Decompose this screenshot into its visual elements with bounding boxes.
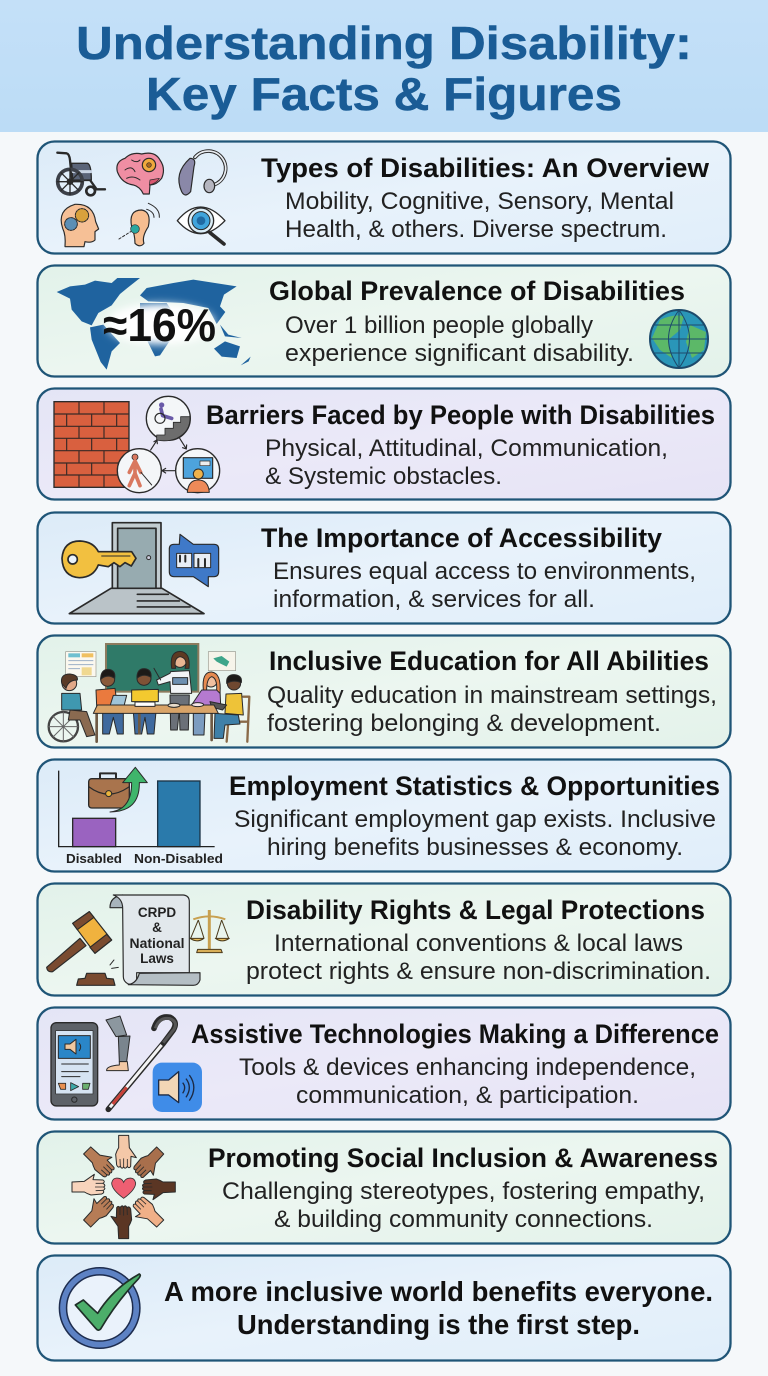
heading: Assistive Technologies Making a Difference xyxy=(191,1019,719,1049)
body text: information, & services for all. xyxy=(273,586,595,613)
scroll text: National xyxy=(130,936,184,951)
panel: global prevalence xyxy=(38,266,730,376)
bar label: non-disabled: Non-Disabled xyxy=(134,851,223,866)
heading: Inclusive Education for All Abilities xyxy=(269,646,709,676)
body text: experience significant disability. xyxy=(285,340,634,367)
icon: growth arrow xyxy=(110,767,147,812)
icon: wheelchair xyxy=(57,153,105,195)
body text: & building community connections. xyxy=(274,1206,653,1233)
icon: person with cane xyxy=(117,449,161,493)
icon: speaker app xyxy=(153,1063,202,1112)
poster right xyxy=(208,652,236,671)
heading: Global Prevalence of Disabilities xyxy=(269,276,685,306)
closing statement: A more inclusive world benefits everyone. xyxy=(164,1276,713,1307)
body text xyxy=(246,930,711,985)
body text: Mobility, Cognitive, Sensory, Mental xyxy=(285,188,674,215)
body text xyxy=(222,1178,705,1233)
scroll text xyxy=(130,905,184,966)
icon: gavel xyxy=(47,912,118,985)
panel: closing message xyxy=(38,1256,730,1360)
heading: Types of Disabilities: An Overview xyxy=(261,153,710,183)
body text: & Systemic obstacles. xyxy=(265,463,502,490)
icon: door and ramp xyxy=(69,523,204,614)
teacher xyxy=(154,651,192,730)
body text: Physical, Attitudinal, Communication, xyxy=(265,435,668,462)
icon: briefcase xyxy=(89,773,129,808)
body text: communication, & participation. xyxy=(296,1082,639,1109)
body text xyxy=(273,558,696,613)
icons: brick wall and barrier cycle xyxy=(54,396,220,493)
body text: Ensures equal access to environments, xyxy=(273,558,696,585)
bar: non-disabled xyxy=(158,781,200,847)
icon: eye with magnifier xyxy=(177,207,225,244)
student in yellow xyxy=(132,669,158,734)
student in purple xyxy=(192,672,221,735)
scroll text: Laws xyxy=(140,951,174,966)
body text: Significant employment gap exists. Inclusive xyxy=(234,806,716,833)
table xyxy=(93,702,218,742)
body text: Over 1 billion people globally xyxy=(285,312,593,339)
panel: inclusive education xyxy=(38,636,730,748)
bar label: disabled: Disabled xyxy=(66,851,122,866)
arrows between circles xyxy=(151,438,187,473)
body text xyxy=(285,188,674,243)
icon: key xyxy=(62,541,136,578)
body text xyxy=(285,312,634,367)
chalkboard xyxy=(106,644,198,692)
map continents xyxy=(57,278,251,370)
icon: white cane xyxy=(108,1017,175,1109)
heading: Employment Statistics & Opportunities xyxy=(229,771,720,801)
icon: brain xyxy=(117,153,163,194)
bar chart xyxy=(59,767,223,866)
student in wheelchair xyxy=(49,674,95,741)
heading: The Importance of Accessibility xyxy=(261,523,662,553)
heart xyxy=(112,1178,136,1198)
icon: scales xyxy=(190,910,229,953)
icon: person at screen xyxy=(176,449,220,493)
illustration: classroom xyxy=(49,644,249,742)
icon: check mark in circle xyxy=(63,1271,140,1345)
panel: barriers xyxy=(38,388,730,500)
icons: gavel, scroll, scales xyxy=(47,895,229,985)
poster left xyxy=(66,652,96,677)
icon: wheelchair at stairs xyxy=(146,396,190,441)
body text xyxy=(234,806,716,861)
body text: Health, & others. Diverse spectrum. xyxy=(285,216,667,243)
body text xyxy=(265,435,668,490)
icons: door, key and speech bubble xyxy=(62,523,219,614)
scroll text: CRPD xyxy=(138,905,176,920)
icon: ear xyxy=(119,203,159,246)
body text: hiring benefits businesses & economy. xyxy=(267,834,683,861)
panel: employment xyxy=(38,760,730,872)
statistic: ≈16% xyxy=(103,299,216,351)
title line 1: Understanding Disability: xyxy=(76,17,692,69)
panel: social inclusion xyxy=(38,1132,730,1244)
icons: assistive devices xyxy=(51,1016,202,1112)
scroll text: & xyxy=(152,920,162,935)
student at right on chair xyxy=(210,675,249,742)
icon: smartphone xyxy=(51,1023,98,1106)
icon: speech bubble with quotes xyxy=(169,534,219,587)
title banner xyxy=(0,0,768,132)
bar: disabled xyxy=(73,818,116,847)
icons: disability types xyxy=(57,151,226,247)
title line 2: Key Facts & Figures xyxy=(146,68,622,120)
body text: fostering belonging & development. xyxy=(267,710,661,737)
panel: accessibility xyxy=(38,512,730,624)
icon: head with gears xyxy=(61,204,99,247)
heading: Promoting Social Inclusion & Awareness xyxy=(208,1143,718,1173)
world map with percentage xyxy=(57,278,251,370)
body text xyxy=(267,682,717,737)
icon: globe xyxy=(650,310,708,368)
axes xyxy=(59,771,215,847)
icon: brick wall xyxy=(54,402,129,487)
body text: Tools & devices enhancing independence, xyxy=(239,1054,696,1081)
laptop xyxy=(110,695,127,706)
panel: rights xyxy=(38,884,730,996)
icon: hearing aid xyxy=(179,151,226,195)
body text: protect rights & ensure non-discrimination. xyxy=(246,958,711,985)
heading: Barriers Faced by People with Disabilities xyxy=(206,400,715,430)
body text: Challenging stereotypes, fostering empathy, xyxy=(222,1178,705,1205)
closing statement: Understanding is the first step. xyxy=(237,1309,640,1340)
closing statement xyxy=(164,1276,713,1340)
icon: circle of hands with heart xyxy=(72,1135,175,1239)
body text xyxy=(239,1054,696,1109)
body text: International conventions & local laws xyxy=(274,930,683,957)
panel: assistive technologies xyxy=(38,1008,730,1120)
icon: scroll xyxy=(110,895,200,985)
icon: prosthetic leg xyxy=(106,1016,130,1071)
body text: Quality education in mainstream settings, xyxy=(267,682,717,709)
heading: Disability Rights & Legal Protections xyxy=(246,895,705,925)
student in orange xyxy=(96,669,123,734)
panel: types of disabilities xyxy=(38,142,730,254)
